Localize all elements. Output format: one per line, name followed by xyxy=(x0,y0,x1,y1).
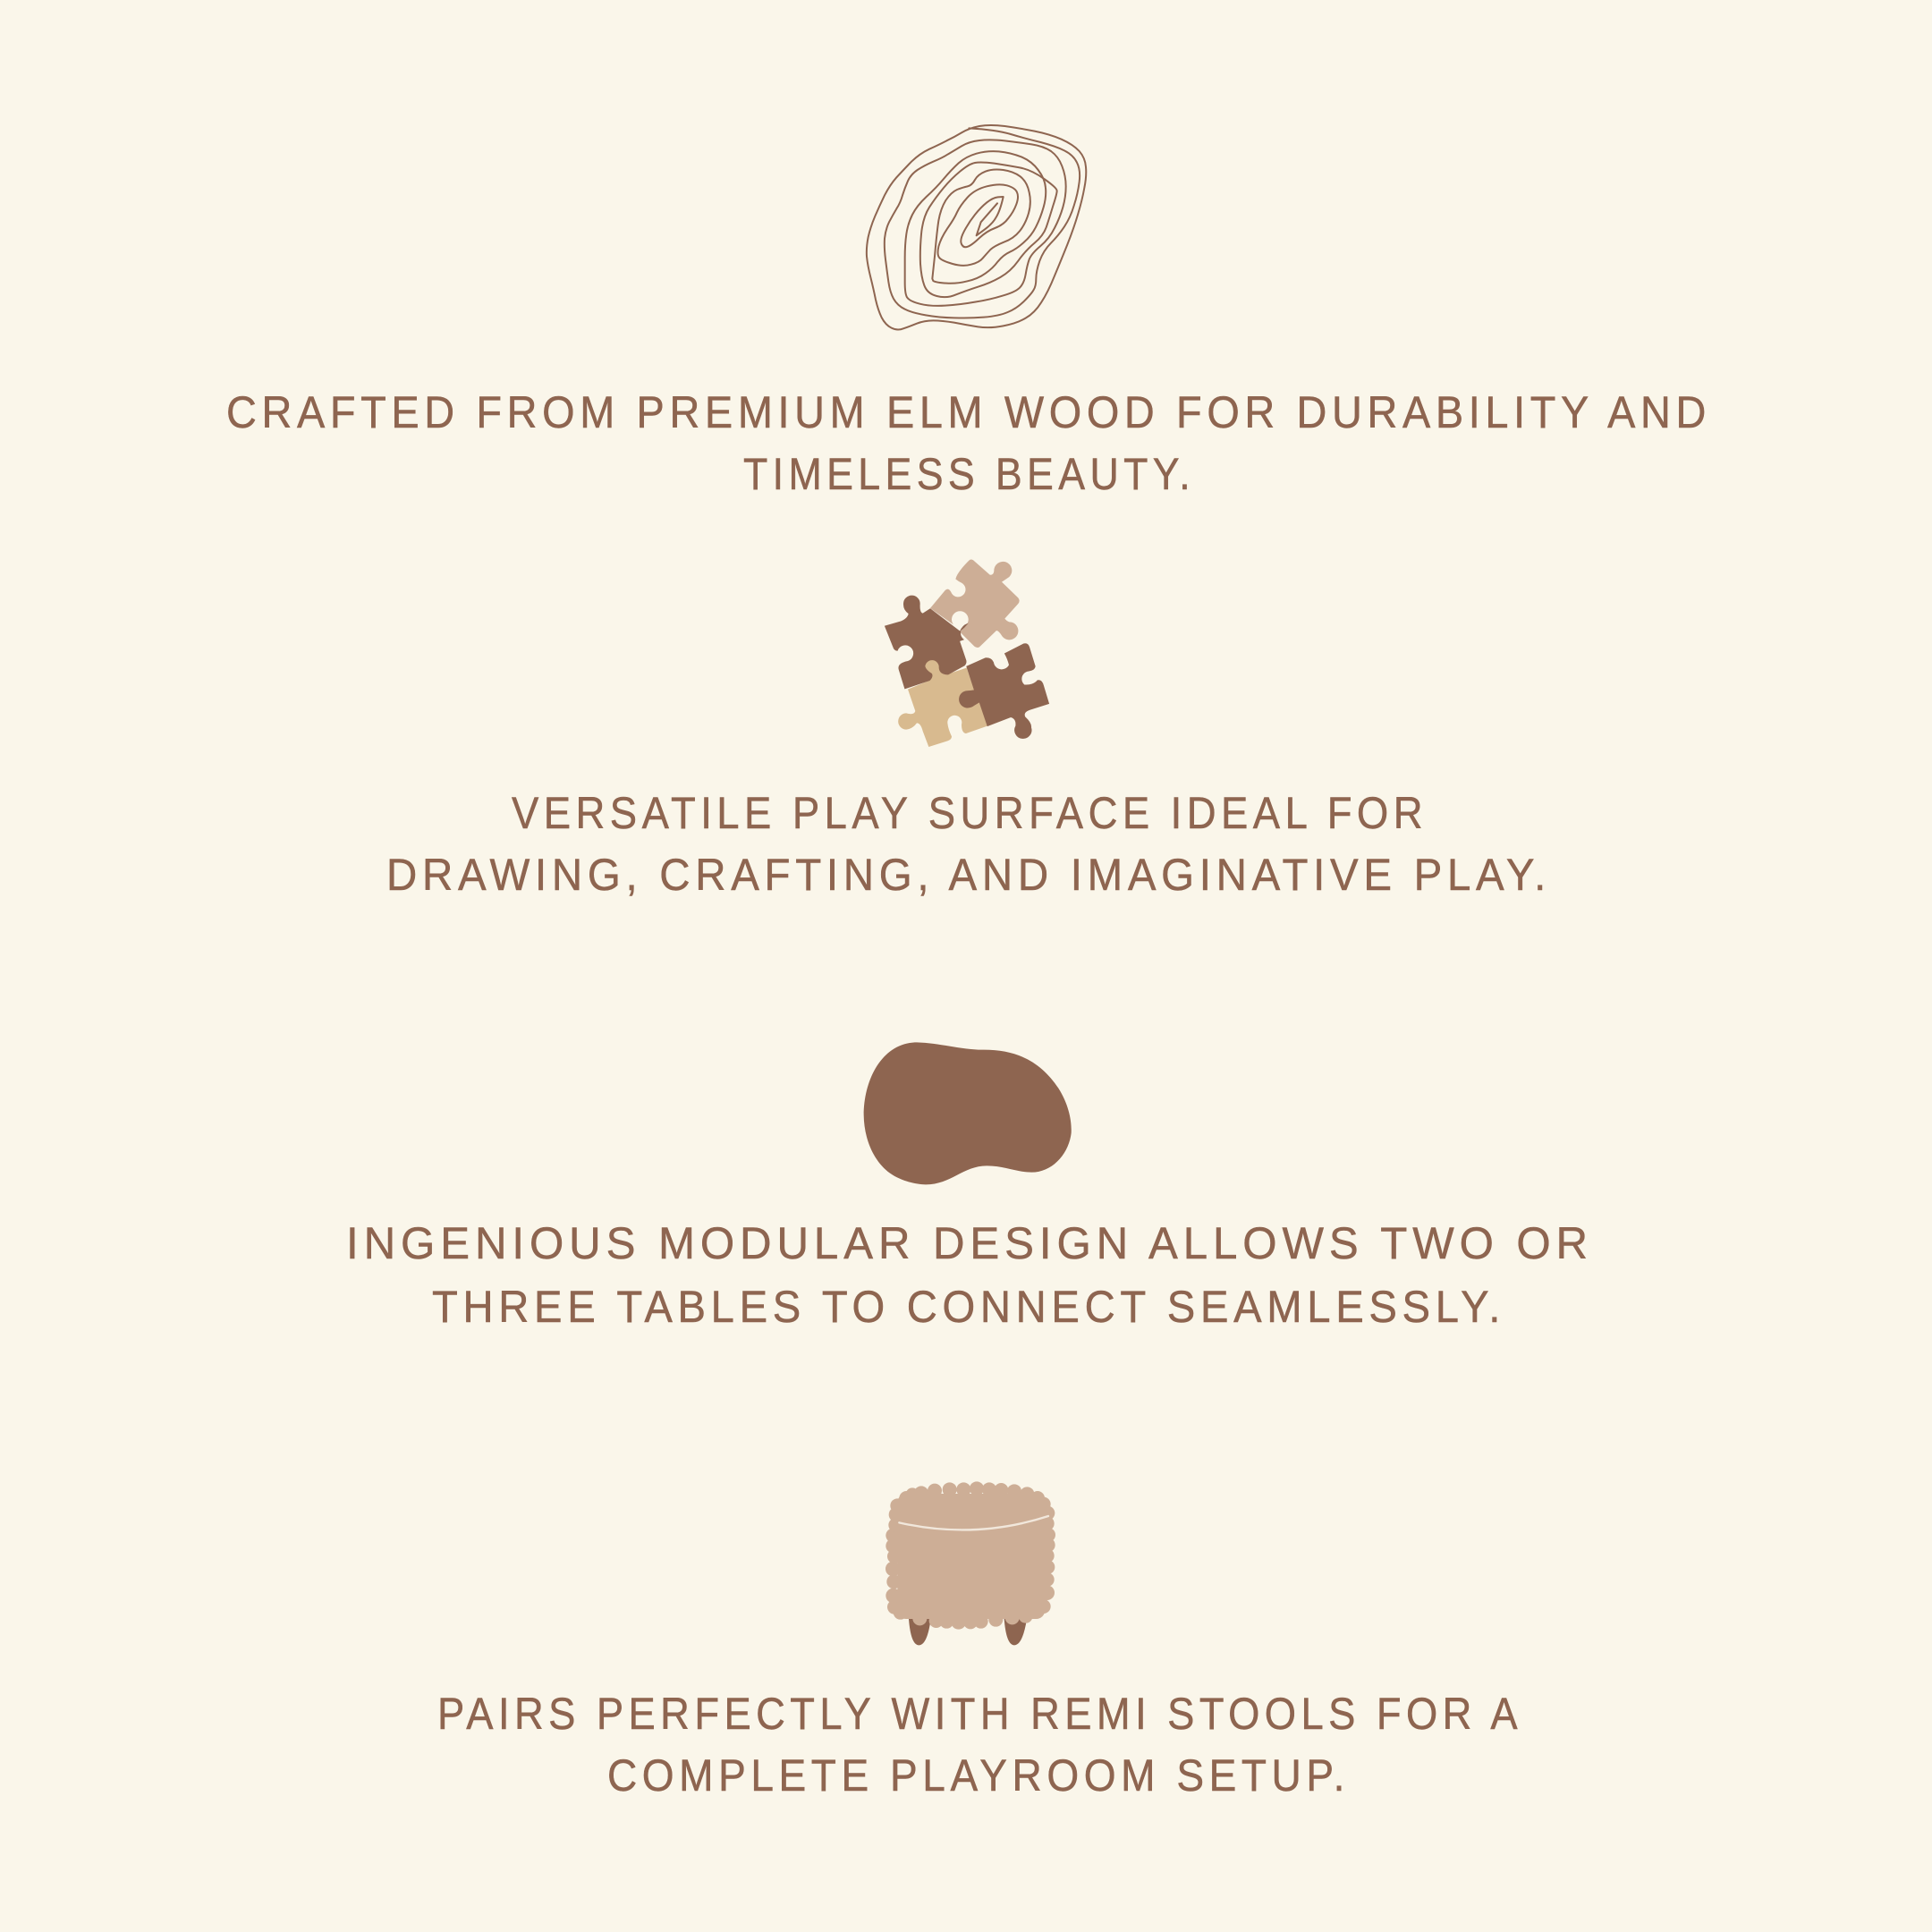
puzzle piece: tan bottom xyxy=(898,660,987,747)
text: pairs perfectly with remi stools xyxy=(437,1689,1522,1801)
text: crafted from premium elm wood: TIMELESS BEAUTY. xyxy=(743,449,1195,499)
stool legs xyxy=(909,1619,1027,1645)
puzzle piece: dark right xyxy=(959,644,1049,739)
icon: table top blob xyxy=(864,1042,1072,1184)
puzzle piece: dark left xyxy=(885,596,968,689)
stool seam line xyxy=(899,1516,1048,1530)
text: versatile play surface: VERSATILE PLAY SURFACE IDEAL FOR xyxy=(512,788,1428,838)
text: ingenious modular design xyxy=(346,1218,1593,1332)
text: versatile play surface: DRAWING, CRAFTING, AND IMAGINATIVE PLAY. xyxy=(386,850,1551,900)
text: pairs perfectly with remi stools: PAIRS PERFECTLY WITH REMI STOOLS FOR A xyxy=(437,1689,1522,1739)
text: crafted from premium elm wood xyxy=(226,387,1711,499)
icon: wood rings xyxy=(867,125,1086,330)
text: versatile play surface xyxy=(386,788,1551,900)
text: pairs perfectly with remi stools: COMPLETE PLAYROOM SETUP. xyxy=(607,1750,1350,1801)
stool body xyxy=(886,1481,1055,1630)
icon: puzzle pieces xyxy=(885,559,1049,747)
puzzle piece: light top right xyxy=(930,559,1020,648)
text: ingenious modular design: THREE TABLES TO CONNECT SEAMLESSLY. xyxy=(432,1282,1505,1332)
icon: stool xyxy=(886,1481,1055,1645)
text: ingenious modular design: INGENIOUS MODULAR DESIGN ALLOWS TWO OR xyxy=(346,1218,1593,1268)
text: crafted from premium elm wood: CRAFTED FROM PREMIUM ELM WOOD FOR DURABILITY AND xyxy=(226,387,1711,437)
